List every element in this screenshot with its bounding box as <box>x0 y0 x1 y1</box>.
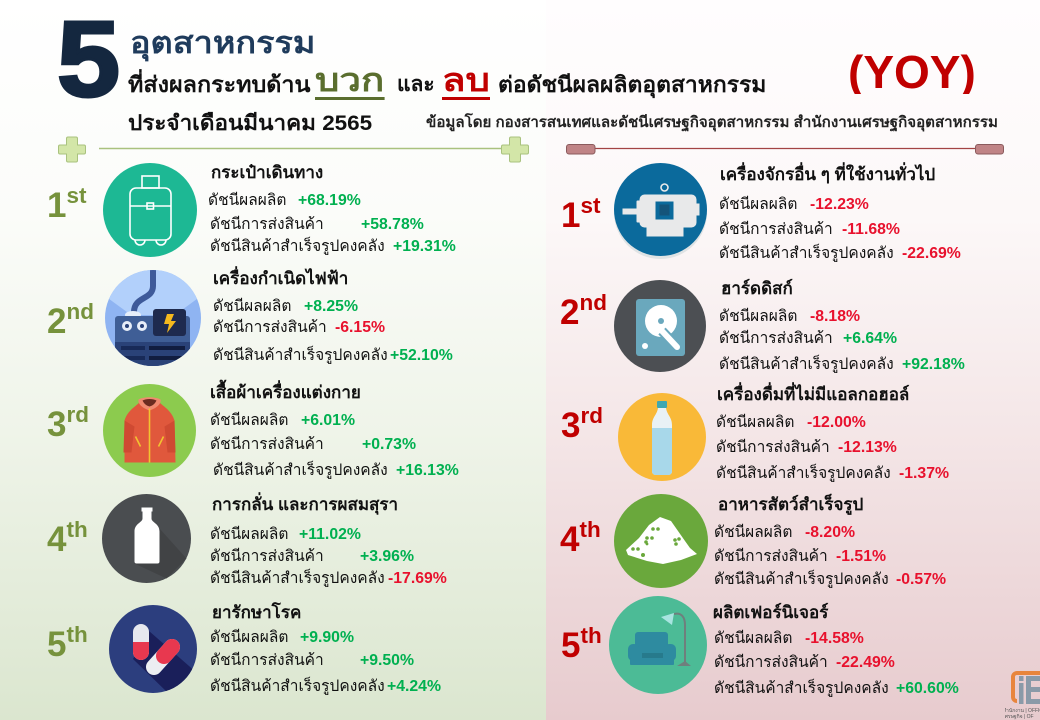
shipment index: ดัชนีการส่งสินค้า <box>719 330 833 347</box>
industry title: อาหารสัตว์สำเร็จรูป <box>718 495 863 514</box>
inventory index: ดัชนีสินค้าสำเร็จรูปคงคลัง <box>719 356 894 373</box>
icon: suitcase <box>103 163 197 257</box>
production index: ดัชนีผลผลิต <box>210 629 288 646</box>
production index <box>210 526 361 543</box>
industry title: เครื่องจักรอื่น ๆ ที่ใช้งานทั่วไป <box>720 165 935 184</box>
inventory index: ดัชนีสินค้าสำเร็จรูปคงคลัง <box>213 347 388 364</box>
panel: negative rank 3 soft drinks: -1.37% <box>899 465 949 482</box>
inventory index: ดัชนีสินค้าสำเร็จรูปคงคลัง <box>716 465 891 482</box>
panel: negative rank 1 general machinery: -22.69% <box>902 245 961 262</box>
panel: negative rank 1 general machinery: -12.23% <box>810 196 869 213</box>
shipment index <box>210 652 414 669</box>
panel: negative rank 3 soft drinks <box>561 382 949 482</box>
panel: negative rank 3 soft drinks: -12.00% <box>807 414 866 431</box>
production index: ดัชนีผลผลิต <box>213 298 291 315</box>
icon: generator <box>105 270 201 366</box>
shipment index <box>210 548 414 565</box>
rank 4th: 4th <box>47 516 88 558</box>
shipment index: ดัชนีการส่งสินค้า <box>213 319 327 336</box>
panel: positive rank 2 generators: +8.25% <box>304 298 358 315</box>
production index: ดัชนีผลผลิต <box>210 526 288 543</box>
panel: negative rank 3 soft drinks: -12.13% <box>838 439 897 456</box>
panel: positive rank 4 distilled spirits: -17.69% <box>388 570 447 587</box>
shipment index: ดัชนีการส่งสินค้า <box>210 652 324 669</box>
shipment index: ดัชนีการส่งสินค้า <box>210 436 324 453</box>
icon: capsules <box>109 605 197 693</box>
panel: positive rank 1 luggage: +68.19% <box>298 192 361 209</box>
panel: positive rank 5 pharmaceuticals: +9.90% <box>300 629 354 646</box>
icon: feed pile <box>614 494 708 588</box>
panel: negative rank 4 animal feed: -1.51% <box>836 548 886 565</box>
logo mark <box>1005 668 1040 708</box>
rank 5th: 5th <box>561 622 602 664</box>
panel: negative rank 4 animal feed: -8.20% <box>805 524 855 541</box>
panel: positive rank 5 pharmaceuticals <box>47 602 441 695</box>
divider: negative side with minus bars <box>566 144 1004 154</box>
inventory index: ดัชนีสินค้าสำเร็จรูปคงคลัง <box>719 245 894 262</box>
industry title: ฮาร์ดดิสก์ <box>721 279 793 298</box>
shipment index: ดัชนีการส่งสินค้า <box>714 548 828 565</box>
inventory index <box>213 460 459 479</box>
rank 2nd: 2nd <box>560 290 607 332</box>
heading text part 1: ที่ส่งผลกระทบด้าน <box>128 72 310 97</box>
panel: positive rank 1 luggage <box>47 163 456 257</box>
shipment index <box>210 436 416 453</box>
panel: negative rank 2 hard disk: +6.64% <box>843 330 897 347</box>
panel: positive rank 5 pharmaceuticals: +9.50% <box>360 652 414 669</box>
inventory index <box>719 244 961 262</box>
panel: negative rank 2 hard disk: -8.18% <box>810 308 860 325</box>
divider: positive side with plus icons <box>58 136 529 162</box>
rank 1st: 1st <box>561 192 600 234</box>
panel: positive rank 5 pharmaceuticals: +4.24% <box>387 678 441 695</box>
background: left green half <box>0 0 546 720</box>
production index: ดัชนีผลผลิต <box>210 412 288 429</box>
rank 2nd: 2nd <box>47 298 94 340</box>
inventory index: ดัชนีสินค้าสำเร็จรูปคงคลัง <box>213 462 388 479</box>
inventory index <box>213 346 453 364</box>
rank 3rd: 3rd <box>561 402 603 444</box>
panel: positive rank 4 distilled spirits <box>47 492 447 587</box>
inventory index: ดัชนีสินค้าสำเร็จรูปคงคลัง <box>210 238 385 255</box>
production index: ดัชนีผลผลิต <box>719 196 797 213</box>
panel: negative rank 5 furniture: +60.60% <box>896 680 959 697</box>
rank 3rd: 3rd <box>47 402 89 444</box>
panel: negative rank 4 animal feed: -0.57% <box>896 571 946 588</box>
inventory index: ดัชนีสินค้าสำเร็จรูปคงคลัง <box>210 678 385 695</box>
panel: negative rank 2 hard disk <box>560 278 965 373</box>
industry title: เสื้อผ้าเครื่องแต่งกาย <box>210 383 361 402</box>
shipment index <box>210 216 424 233</box>
rank 5th: 5th <box>47 622 88 664</box>
production index: ดัชนีผลผลิต <box>719 308 797 325</box>
shipment index: ดัชนีการส่งสินค้า <box>719 221 833 238</box>
rank 4th: 4th <box>560 516 601 558</box>
icon: electric motor <box>614 163 707 259</box>
panel: negative rank 2 hard disk: +92.18% <box>902 356 965 373</box>
icon: sofa and lamp <box>609 596 707 694</box>
panel: positive rank 2 generators <box>47 266 453 366</box>
panel: positive rank 1 luggage: +58.78% <box>361 216 424 233</box>
inventory index <box>210 568 447 587</box>
big number 5: 5 <box>57 0 120 119</box>
shipment index: ดัชนีการส่งสินค้า <box>716 439 830 456</box>
panel: positive rank 3 apparel: +16.13% <box>396 462 459 479</box>
rank 1st: 1st <box>47 182 86 224</box>
heading text part 2: ต่อดัชนีผลผลิตอุตสาหกรรม <box>498 72 766 97</box>
production index: ดัชนีผลผลิต <box>714 630 792 647</box>
heading line: positive and negative impact <box>128 62 766 100</box>
panel: negative rank 5 furniture: -22.49% <box>836 654 895 671</box>
logo caption <box>1003 708 1040 720</box>
title: industries: อุตสาหกรรม <box>130 27 315 60</box>
panel: negative rank 1 general machinery <box>561 162 961 262</box>
inventory index: ดัชนีสินค้าสำเร็จรูปคงคลัง <box>210 570 385 587</box>
industry title: การกลั่น และการผสมสุรา <box>212 495 398 514</box>
panel: negative rank 5 furniture: -14.58% <box>805 630 864 647</box>
background: right red half <box>546 0 1040 720</box>
panel: positive rank 4 distilled spirits: +11.02% <box>299 526 361 543</box>
production index <box>208 192 361 209</box>
source credit: ข้อมูลโดย กองสารสนเทศและดัชนีเศรษฐกิจอุตสาหกรรม สำนักงานเศรษฐกิจอุตสาหกรรม <box>426 114 998 131</box>
production index: ดัชนีผลผลิต <box>208 192 286 209</box>
panel: positive rank 3 apparel: +6.01% <box>301 412 355 429</box>
word: and: และ <box>397 73 435 96</box>
industry title: เครื่องกำเนิดไฟฟ้า <box>213 269 348 288</box>
industry title: ยารักษาโรค <box>212 603 301 622</box>
panel: positive rank 2 generators: -6.15% <box>335 319 385 336</box>
icon: hard disk <box>614 280 706 372</box>
inventory index: ดัชนีสินค้าสำเร็จรูปคงคลัง <box>714 680 889 697</box>
production index: ดัชนีผลผลิต <box>716 414 794 431</box>
heading: month and year: ประจำเดือนมีนาคม 2565 <box>128 112 372 135</box>
production index <box>719 308 860 325</box>
shipment index: ดัชนีการส่งสินค้า <box>714 654 828 671</box>
panel: positive rank 3 apparel: +0.73% <box>362 436 416 453</box>
icon: liquor bottle <box>102 494 191 583</box>
shipment index <box>719 330 897 347</box>
icon: water bottle <box>618 393 706 481</box>
production index <box>213 298 358 315</box>
shipment index: ดัชนีการส่งสินค้า <box>210 548 324 565</box>
word: positive: บวก <box>315 62 384 98</box>
shipment index: ดัชนีการส่งสินค้า <box>210 216 324 233</box>
production index <box>210 628 354 646</box>
logo: office of industrial economics <box>1005 668 1040 720</box>
industry title: กระเป๋าเดินทาง <box>211 163 323 182</box>
inventory index <box>210 236 456 255</box>
panel: negative rank 1 general machinery: -11.68% <box>842 221 900 238</box>
panel: positive rank 1 luggage: +19.31% <box>393 238 456 255</box>
panel: negative rank 4 animal feed <box>555 492 975 590</box>
industry title: เครื่องดื่มที่ไม่มีแอลกอฮอล์ <box>717 385 909 404</box>
inventory index: ดัชนีสินค้าสำเร็จรูปคงคลัง <box>714 571 889 588</box>
panel: positive rank 3 apparel <box>47 380 459 479</box>
shipment index <box>213 318 385 336</box>
inventory index <box>210 676 441 695</box>
panel: positive rank 2 generators: +52.10% <box>390 347 453 364</box>
industry title: ผลิตเฟอร์นิเจอร์ <box>713 603 828 622</box>
icon: jacket <box>103 384 196 477</box>
production index: ดัชนีผลผลิต <box>714 524 792 541</box>
production index <box>210 412 355 429</box>
production index <box>719 196 869 213</box>
panel: positive rank 4 distilled spirits: +3.96% <box>360 548 414 565</box>
word: negative: ลบ <box>442 62 490 98</box>
panel: negative rank 5 furniture <box>555 594 975 700</box>
shipment index <box>719 220 900 238</box>
